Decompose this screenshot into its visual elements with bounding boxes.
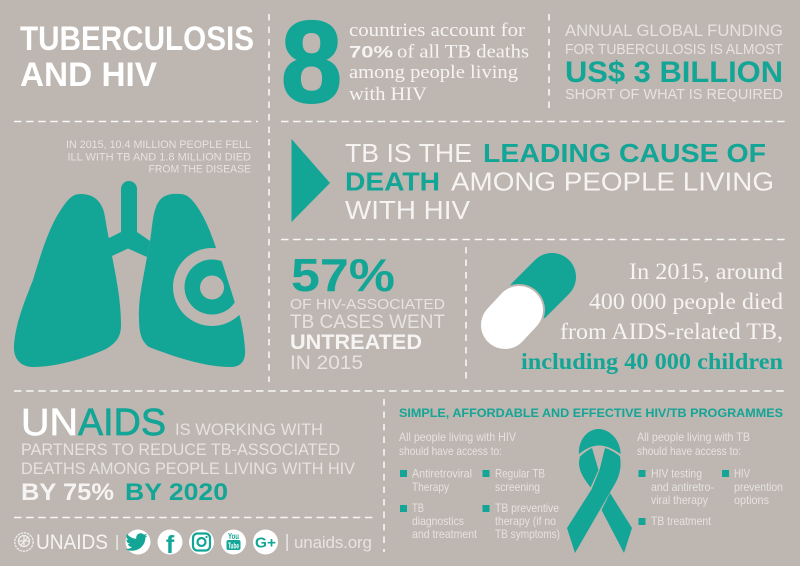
- funding shortfall: [565, 22, 783, 103]
- HIV access list: TB symptoms): [495, 528, 560, 541]
- icon: twitter: [126, 530, 150, 554]
- disease burden note: [66, 139, 251, 176]
- disease burden note: ILL WITH TB AND 1.8 MILLION DIED: [68, 152, 251, 164]
- AIDS-related TB deaths: [521, 259, 783, 375]
- icon: ribbon: [567, 429, 632, 553]
- TB access list: options: [734, 494, 769, 507]
- headline: TB IS THE: [345, 138, 472, 168]
- HIV access list: screening: [495, 481, 540, 494]
- HIV access list: All people living with HIV: [399, 431, 516, 444]
- disease burden note: FROM THE DISEASE: [148, 164, 251, 176]
- title: [20, 20, 254, 94]
- TB access list: HIV testing: [651, 468, 702, 480]
- HIV access list: diagnostics: [412, 515, 464, 528]
- title: AND HIV: [20, 56, 157, 94]
- arrow: triangle: [292, 139, 330, 222]
- HIV access list: and treatment: [412, 528, 478, 541]
- title: TUBERCULOSIS: [20, 20, 254, 58]
- UNAIDS commitment: IS WORKING WITH: [175, 420, 323, 439]
- AIDS-related TB deaths: from AIDS-related TB,: [560, 319, 783, 345]
- TB access list: and antiretro-: [651, 481, 714, 494]
- headline: [345, 138, 774, 225]
- TB access list: [637, 431, 783, 528]
- UNAIDS commitment: AIDS: [78, 402, 166, 444]
- icon: instagram: [189, 530, 214, 554]
- AIDS-related TB deaths: In 2015, around: [629, 259, 783, 285]
- HIV access list: should have access to:: [399, 445, 502, 458]
- stat description: of all TB deaths: [397, 42, 529, 62]
- stat: 57 percent untreated: IN 2015: [290, 352, 363, 374]
- programmes heading: SIMPLE, AFFORDABLE AND EFFECTIVE HIV/TB PROGRAMMES: [399, 406, 783, 420]
- icon: pill: [505, 277, 552, 325]
- headline: AMONG PEOPLE LIVING: [451, 166, 774, 196]
- stat: 57 percent untreated: [290, 249, 445, 374]
- headline: DEATH: [345, 166, 440, 196]
- UNAIDS wordmark: UNAIDS: [36, 531, 108, 554]
- UNAIDS commitment: BY 2020: [125, 479, 228, 506]
- headline: LEADING CAUSE OF: [483, 138, 766, 168]
- HIV access list: TB preventive: [495, 502, 559, 515]
- TB access list: All people living with TB: [637, 431, 750, 444]
- icon: UN emblem: [15, 533, 33, 551]
- icon: google plus: G+: [255, 534, 276, 552]
- UNAIDS commitment: BY 75%: [21, 479, 114, 506]
- icon: facebook: [158, 530, 182, 559]
- footer: logo and social: [15, 530, 372, 559]
- funding shortfall: ANNUAL GLOBAL FUNDING: [565, 22, 783, 40]
- icon: youtube: You: [228, 532, 239, 541]
- UNAIDS commitment: [21, 402, 356, 506]
- stat: 8 countries: [281, 0, 529, 127]
- funding shortfall: FOR TUBERCULOSIS IS ALMOST: [565, 41, 783, 58]
- TB access list: prevention: [734, 481, 783, 494]
- TB access list: TB treatment: [651, 515, 712, 528]
- stat description: among people living: [349, 62, 519, 83]
- stat description: 70%: [349, 42, 393, 62]
- funding shortfall: US$ 3 BILLION: [565, 56, 783, 89]
- HIV access list: therapy (if no: [495, 515, 556, 528]
- icon: lungs: [14, 181, 251, 367]
- AIDS-related TB deaths: 400 000 people died: [589, 289, 783, 315]
- panel: programmes: [399, 406, 783, 553]
- TB access list: HIV: [734, 468, 750, 480]
- HIV access list: [399, 431, 560, 541]
- TB access list: should have access to:: [637, 445, 741, 458]
- stat description: [349, 20, 529, 105]
- UNAIDS commitment: DEATHS AMONG PEOPLE LIVING WITH HIV: [21, 459, 356, 478]
- website: unaids.org: [294, 533, 372, 552]
- TB access list: viral therapy: [651, 494, 708, 507]
- AIDS-related TB deaths: including 40 000 children: [521, 349, 783, 375]
- icon: youtube: Tube: [228, 542, 239, 550]
- stat: 57 percent untreated: OF HIV-ASSOCIATED: [290, 296, 445, 313]
- stat description: countries account for: [349, 20, 526, 41]
- stat description: with HIV: [349, 84, 427, 105]
- icon: google plus: [253, 530, 278, 554]
- big number 8: 8: [281, 0, 342, 127]
- UNAIDS commitment: PARTNERS TO REDUCE TB-ASSOCIATED: [21, 440, 340, 459]
- UNAIDS commitment: UN: [21, 402, 78, 444]
- stat: 57 percent untreated: UNTREATED: [290, 331, 422, 354]
- icon: facebook: f: [166, 531, 175, 559]
- stat: 57 percent untreated: TB CASES WENT: [290, 311, 445, 333]
- funding shortfall: SHORT OF WHAT IS REQUIRED: [565, 86, 783, 103]
- icon: youtube: [221, 530, 246, 554]
- stat: 57 percent untreated: 57%: [291, 249, 395, 301]
- HIV access list: Antiretroviral: [412, 468, 472, 480]
- HIV access list: TB: [412, 502, 424, 515]
- HIV access list: Regular TB: [495, 468, 545, 480]
- HIV access list: Therapy: [412, 481, 449, 494]
- headline: WITH HIV: [345, 195, 471, 225]
- disease burden note: IN 2015, 10.4 MILLION PEOPLE FELL: [66, 139, 251, 151]
